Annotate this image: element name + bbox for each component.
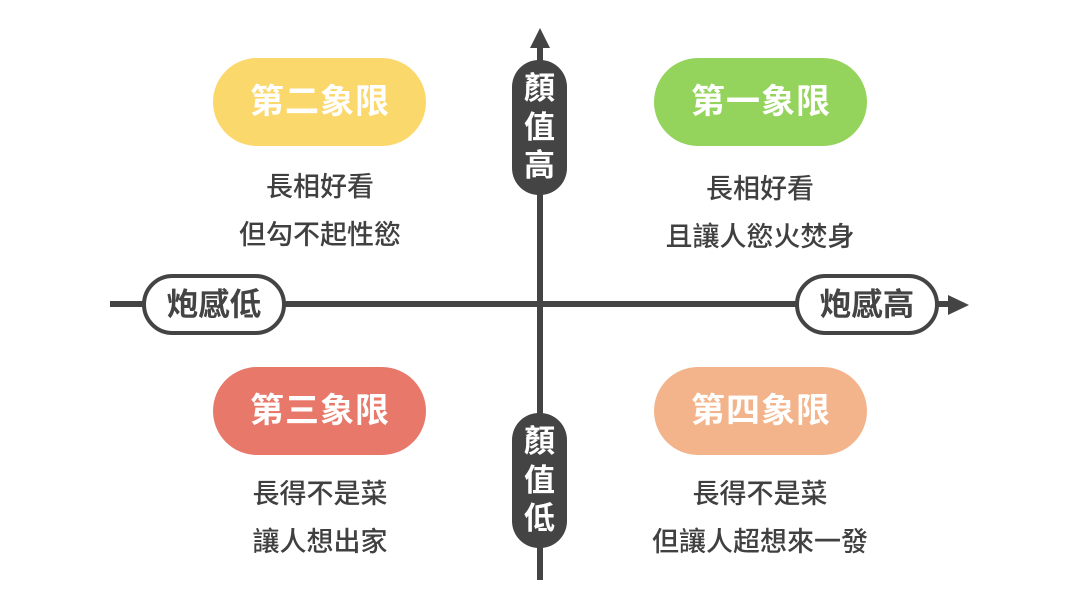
axis label: 炮感低 [142,274,286,335]
text: quadrant 1 description: 長相好看 [706,174,814,204]
axis label: 顏值高 [512,60,567,195]
axis label: 炮感高: 炮感高 [820,286,914,322]
horizontal axis: 炮感 [110,301,952,307]
text: quadrant 2 description: 但勾不起性慾 [239,220,401,250]
text: quadrant 2 description: 長相好看 [266,172,374,202]
panel: quadrant 1 [654,58,867,252]
panel: quadrant 4 [652,367,868,557]
text: quadrant 3 description: 長得不是菜 [252,479,388,509]
axis label: 顏值低: 顏 [524,424,555,459]
axis label: 炮感低: 炮感低 [167,286,261,322]
panel: quadrant 2 [213,58,426,250]
panel: quadrant 3 [213,367,426,557]
axis label: 顏值高: 值 [524,110,555,144]
axis label: 顏值低: 低 [524,501,555,536]
text: quadrant 2 description [239,172,401,250]
axis label: 顏值高: 高 [524,148,555,183]
axis label: 顏值高: 顏 [524,71,555,106]
text: quadrant 4 description: 但讓人超想來一發 [652,527,868,557]
axis label: 炮感高 [795,274,939,335]
text: quadrant 1 description: 且讓人慾火焚身 [666,222,854,252]
heading: 第三象限 [213,367,426,455]
axis label: 顏值低 [512,413,567,548]
text: quadrant 3 description: 讓人想出家 [252,527,388,557]
heading: 第一象限: 第一象限 [691,83,831,121]
text: quadrant 1 description [666,174,854,252]
heading: 第一象限 [654,58,867,146]
text: quadrant 3 description [252,479,388,557]
axis label: 顏值低: 值 [524,462,555,498]
heading: 第二象限: 第二象限 [250,83,390,121]
text: quadrant 4 description: 長得不是菜 [692,479,828,509]
vertical axis: 顏值 [537,44,543,580]
heading: 第二象限 [213,58,426,146]
arrow: horizontal axis head [948,295,969,315]
heading: 第四象限 [654,367,867,455]
arrow: vertical axis head [530,28,550,48]
heading: 第四象限: 第四象限 [691,392,831,430]
heading: 第三象限: 第三象限 [250,392,390,430]
text: quadrant 4 description [652,479,868,557]
